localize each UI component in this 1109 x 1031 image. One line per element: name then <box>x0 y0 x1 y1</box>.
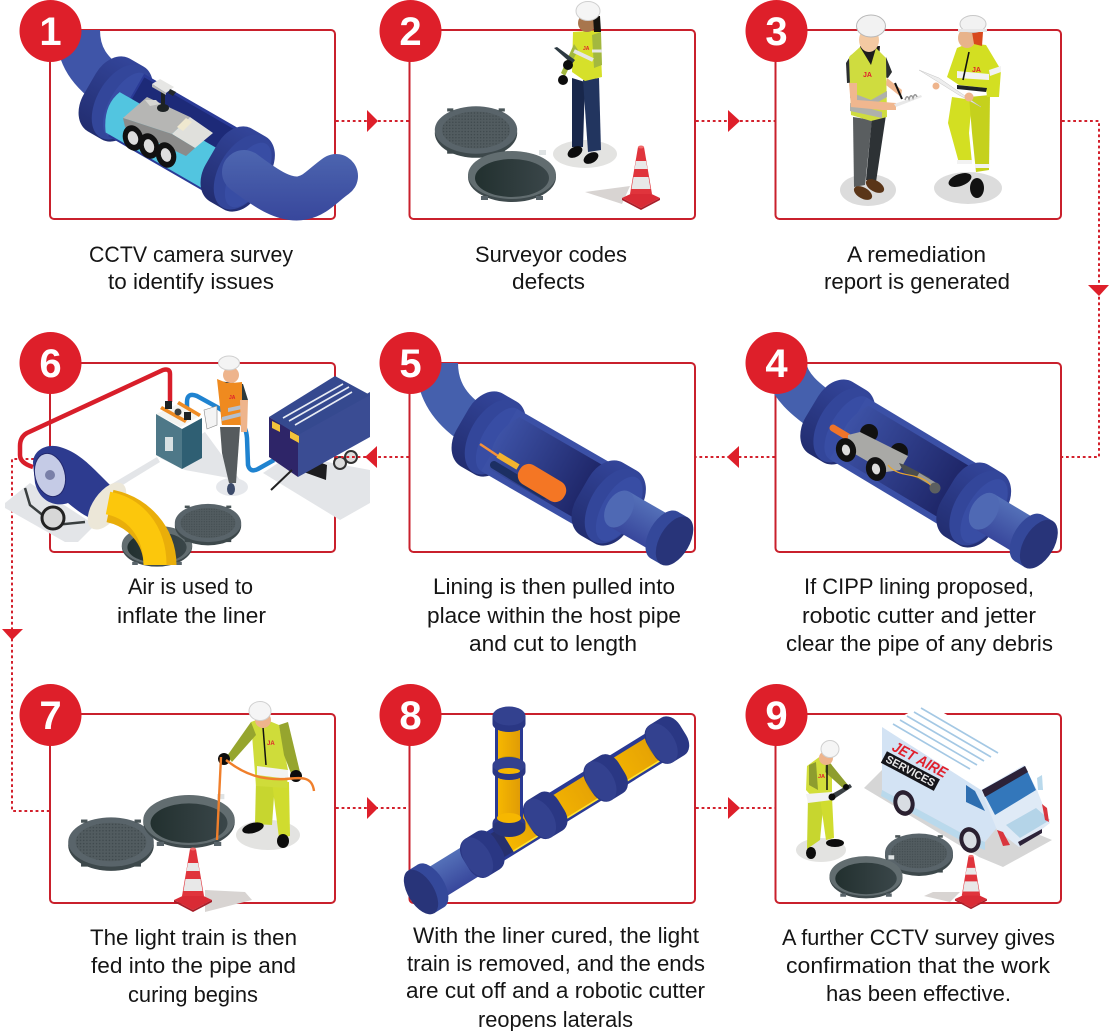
panel 9: further survey <box>746 684 1061 1006</box>
caption 4: robotic cutter and jetter <box>802 603 1036 628</box>
arrow: step 1 to 2 <box>336 110 409 132</box>
icon: manhole lid <box>885 833 953 876</box>
liner <box>480 444 570 506</box>
caption 5: and cut to length <box>469 631 637 656</box>
van lettering <box>881 737 951 793</box>
caption 9: A further CCTV survey gives <box>782 925 1055 950</box>
ground shadows <box>5 432 370 542</box>
badge 7: 7 <box>39 694 62 738</box>
badge 4: 4 <box>765 342 788 386</box>
icon: transformer <box>156 401 202 469</box>
figure: surveyor with tablet: JA <box>583 46 590 52</box>
connectors between steps <box>2 110 1109 819</box>
caption 4: If CIPP lining proposed, <box>804 574 1034 599</box>
robot crawler <box>119 79 213 170</box>
panel 6: air inflation <box>5 332 370 628</box>
figure: operator in orange vest: JA <box>229 395 236 401</box>
badge 3 <box>746 0 808 62</box>
icon: traffic cone <box>174 848 252 912</box>
caption 5: Lining is then pulled into <box>433 574 675 599</box>
arrow: step 2 to 3 <box>696 110 775 132</box>
panel 1: CCTV survey <box>20 0 336 294</box>
figure: engineer with clipboard: JA <box>972 67 981 74</box>
icon: open manhole <box>829 855 903 898</box>
frame <box>50 363 335 552</box>
icon: generator trailer <box>269 376 370 490</box>
icon: manhole lid <box>175 504 241 545</box>
arrow: step 8 to 9 <box>696 797 775 819</box>
badge 8: 8 <box>399 694 422 738</box>
frame <box>776 30 1061 219</box>
badge 9 <box>746 684 808 746</box>
badge 5: 5 <box>399 342 422 386</box>
caption 3: report is generated <box>824 269 1010 294</box>
figure: operator in orange vest <box>204 356 248 496</box>
badge 2: 2 <box>399 10 422 54</box>
arrow: step 4 to 5 <box>696 446 775 468</box>
badge 1: 1 <box>39 10 62 54</box>
icon: air blower <box>25 446 134 536</box>
badge 8 <box>380 684 442 746</box>
figure: surveyor with tablet <box>553 2 617 168</box>
caption 5: place within the host pipe <box>427 603 681 628</box>
caption 1: to identify issues <box>108 269 274 294</box>
caption 8 <box>406 923 705 1031</box>
caption 1 <box>89 242 293 294</box>
caption 9 <box>782 925 1055 1006</box>
icon: manhole lid <box>435 106 517 158</box>
caption 3: A remediation <box>847 242 986 267</box>
caption 8: train is removed, and the ends <box>407 951 705 976</box>
liner shadow <box>494 465 544 495</box>
caption 6 <box>117 574 266 628</box>
frame <box>50 30 335 219</box>
arrow: step 6 to 7 <box>2 459 50 811</box>
caption 4: clear the pipe of any debris <box>786 631 1053 656</box>
caption 2: defects <box>512 269 585 294</box>
frame <box>776 363 1061 552</box>
caption 6: inflate the liner <box>117 603 266 628</box>
icon: manhole lid <box>68 817 154 871</box>
red cable <box>20 370 170 467</box>
van lettering: JET AIRE <box>889 739 951 782</box>
figure: engineer with notepad: JA <box>863 72 872 79</box>
badge 9: 9 <box>765 694 788 738</box>
caption 3 <box>824 242 1010 294</box>
panel 8: cured liner <box>380 684 705 1031</box>
caption 4 <box>786 574 1053 656</box>
figure: worker feeding light train: JA <box>267 741 275 747</box>
caption 6: Air is used to <box>128 574 253 599</box>
caption 7: fed into the pipe and <box>91 953 296 978</box>
caption 2 <box>475 242 627 294</box>
frame <box>410 30 695 219</box>
frame <box>410 714 695 903</box>
badge 2 <box>380 0 442 62</box>
badge 6: 6 <box>39 342 62 386</box>
panel 3: remediation report <box>746 0 1061 294</box>
illustration: pipe with crawler camera <box>69 30 336 220</box>
panel 5: lining pulled in <box>380 332 701 656</box>
robot cutter <box>833 424 940 494</box>
icon: traffic cone <box>924 855 987 909</box>
caption 5 <box>427 574 681 656</box>
lateral pipe <box>492 706 526 837</box>
arrow: step 3 to 4 <box>1062 121 1109 457</box>
figure: surveyor with tablet: JA <box>818 774 825 780</box>
caption 8: are cut off and a robotic cutter <box>406 978 705 1003</box>
illustration: lined T-junction pipe <box>397 706 696 920</box>
panel 4: robotic cutter <box>746 332 1066 656</box>
icon: open manhole <box>122 525 192 567</box>
icon: open manhole <box>468 150 556 202</box>
caption 7: The light train is then <box>90 925 297 950</box>
panel 2: surveyor <box>380 0 695 294</box>
caption 2: Surveyor codes <box>475 242 627 267</box>
badge 5 <box>380 332 442 394</box>
figure: engineer with notepad <box>840 15 922 206</box>
icon: van <box>864 703 1052 867</box>
frame <box>410 363 695 552</box>
badge 1 <box>20 0 82 62</box>
badge 6 <box>20 332 82 394</box>
yellow air duct <box>108 503 160 565</box>
icon: open manhole <box>143 794 235 848</box>
badge 4 <box>746 332 808 394</box>
figure: engineer with clipboard <box>919 16 1002 204</box>
caption 8: With the liner cured, the light <box>413 923 699 948</box>
illustration: host pipe with liner <box>437 363 701 572</box>
frame <box>776 714 1061 903</box>
caption 9: confirmation that the work <box>786 953 1051 978</box>
caption 7 <box>90 925 297 1007</box>
caption 9: has been effective. <box>826 981 1011 1006</box>
illustration: pipe with robot cutter <box>785 363 1066 575</box>
caption 1: CCTV camera survey <box>89 242 293 267</box>
arrow: step 5 to 6 <box>336 446 409 468</box>
panel 7: light train <box>20 684 335 1007</box>
frame <box>50 714 335 903</box>
blue cable <box>187 395 274 470</box>
van lettering: SERVICES <box>883 754 937 789</box>
figure: worker feeding light train <box>217 702 314 850</box>
caption 7: curing begins <box>128 982 258 1007</box>
figure: surveyor with tablet <box>796 740 852 862</box>
badge 7 <box>20 684 82 746</box>
arrow: step 7 to 8 <box>336 797 409 819</box>
badge 3: 3 <box>765 10 788 54</box>
icon: traffic cone <box>585 146 660 210</box>
